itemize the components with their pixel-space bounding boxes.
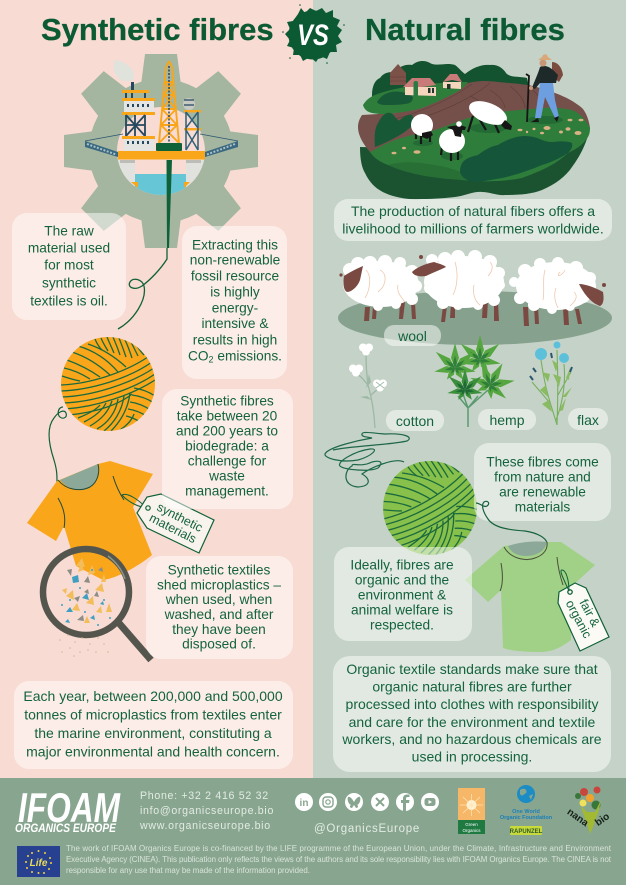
callout: microplastics: disposed of. [182, 636, 256, 652]
social handle: @OrganicsEurope [314, 823, 420, 835]
icon: green yarn ball [383, 461, 477, 555]
callout: extracting fossil resource: intensive & [202, 316, 268, 331]
heading: natural fibres: Natural fibres [365, 12, 565, 47]
logo: nana bio: nana [565, 807, 591, 829]
logo: EU LIFE [17, 846, 60, 877]
illustration: cotton plant [349, 344, 387, 428]
callout: extracting fossil resource: energy- [212, 300, 258, 316]
thread: rig to orange yarn [118, 160, 172, 329]
callout: biodegrade: and 200 years to [176, 424, 278, 438]
panel: natural background [313, 0, 626, 778]
callout: marine environment: major environmental and health concern. [26, 744, 280, 760]
callout: renewable: These fibres come [486, 454, 599, 470]
illustration: hemp plant [433, 335, 521, 427]
callout: livelihood: The production of natural fibers offers a [351, 203, 595, 219]
callout: renewable [474, 443, 611, 521]
illustration: farm island [358, 54, 590, 199]
callout: organic textile standards: and care for the environment and textile [349, 714, 596, 730]
icon: green t-shirt [465, 541, 595, 652]
label: flax: flax [577, 412, 599, 428]
label: wool [384, 325, 441, 346]
callout: organic textile standards: processed into clothes with responsibility [346, 696, 598, 712]
icon: fair and organic tag: fair & [576, 597, 603, 630]
disclaimer text: responsible for any use that may be made of the information provided. [66, 866, 310, 875]
callout: raw material [12, 213, 126, 320]
icon: synthetic materials tag: materials [147, 511, 199, 546]
logo: nana bio [565, 786, 612, 834]
callout: renewable: from nature and [494, 470, 591, 484]
disclaimer text: The work of IFOAM Organics Europe is co-financed by the LIFE programme of the European Union, under the Climate, Infrastructure and Environment [66, 844, 612, 853]
callout: raw material: synthetic [42, 276, 96, 290]
callout: ideally organic: animal welfare is [351, 602, 453, 618]
callout: ideally organic: respected. [370, 618, 434, 632]
icons: social media [295, 793, 439, 811]
label: hemp: hemp [489, 412, 525, 428]
contact details: Phone: +32 2 416 52 32 [140, 790, 269, 802]
callout: microplastics: Synthetic textiles [168, 562, 271, 578]
label: wool: wool [397, 328, 427, 344]
thread: green yarn to shirt [476, 501, 547, 543]
logo: Green Organics: Organics [462, 828, 481, 833]
callout: organic textile standards: organic natural fibres are further [372, 678, 572, 694]
heading: synthetic fibres: Synthetic fibres [41, 12, 274, 47]
callout: extracting fossil resource: emissions. [214, 348, 282, 364]
thread: yarn to shirt [49, 407, 66, 482]
panel: synthetic background [0, 0, 313, 778]
callout: biodegrade: biodegrade: a [185, 438, 269, 454]
callout: organic textile standards: Organic textile standards make sure that [346, 661, 598, 677]
logo: One World Organic Foundation: RAPUNZEL [510, 829, 543, 835]
icons: social media: in [300, 798, 308, 809]
label: cotton [386, 410, 444, 431]
callout: marine environment: tonnes of microplastics from textiles enter [24, 706, 282, 722]
icon: synthetic materials tag [122, 494, 214, 553]
logo: Green Organics [458, 788, 485, 834]
callout: extracting fossil resource: CO [188, 348, 209, 364]
callout: raw material: material used [28, 240, 110, 256]
callout: biodegrade: waste [208, 468, 245, 484]
icon: VS splat [282, 4, 345, 64]
callout: biodegrade [162, 389, 293, 509]
logo: nana bio: bio [593, 811, 612, 829]
callout: biodegrade: management. [185, 484, 269, 498]
callout: organic textile standards: used in processing. [412, 748, 532, 764]
icon: fair and organic tag [558, 570, 609, 651]
callout: renewable: materials [515, 500, 570, 514]
callout: ideally organic: Ideally, fibres are [350, 558, 454, 572]
callout: marine environment [14, 681, 293, 769]
callout: microplastics: when used, when [165, 592, 272, 607]
callout: microplastics [146, 556, 293, 659]
icon: orange t-shirt [27, 461, 153, 580]
contact details: info@organicseurope.bio [140, 805, 274, 817]
callout: biodegrade: take between 20 [177, 408, 278, 424]
callout: extracting fossil resource: is highly [210, 284, 260, 300]
disclaimer text: Executive Agency (CINEA). This publication only reflects the views of the authors and its sole responsibility lies with IFOAM Organics Europe. The CINEA is not [66, 855, 612, 864]
logo: IFOAM Organics Europe: ORGANICS EUROPE [15, 823, 116, 835]
thread: cotton to green yarn [325, 432, 409, 487]
callout: ideally organic: organic and the [355, 572, 449, 588]
callout: extracting fossil resource: fossil resource [191, 268, 279, 284]
callout: ideally organic [334, 547, 472, 641]
callout: raw material: for most [44, 258, 94, 272]
contact details: www.organicseurope.bio [139, 820, 271, 832]
callout: extracting fossil resource: 2 [209, 354, 214, 364]
label: cotton: cotton [396, 413, 434, 429]
label: hemp [478, 409, 536, 430]
logo: EU LIFE: Life [30, 858, 48, 869]
icon: orange yarn ball [61, 337, 155, 431]
callout: biodegrade: challenge for [188, 454, 267, 468]
callout: organic textile standards [333, 656, 611, 772]
callout: extracting fossil resource: non-renewable [190, 252, 280, 268]
callout: extracting fossil resource [182, 226, 287, 379]
panel: footer [0, 778, 626, 885]
callout: extracting fossil resource: results in high [193, 332, 277, 348]
illustration: flax plant [530, 342, 572, 425]
contact details [139, 790, 274, 832]
logo: IFOAM Organics Europe: IFOAM [18, 784, 121, 831]
icon: magnifying glass with microplastics [43, 549, 151, 660]
callout: renewable: are renewable [499, 484, 586, 500]
icon: VS splat: VS [297, 18, 329, 52]
callout: microplastics: they have been [172, 622, 266, 637]
callout: marine environment: the marine environment, constituting a [34, 725, 272, 741]
callout: organic textile standards: workers, and no hazardous chemicals are [341, 731, 602, 747]
callout: microplastics: shed microplastics – [157, 578, 281, 592]
icon: gear with oil rig [64, 54, 258, 248]
icon: fair and organic tag: organic [563, 598, 594, 641]
callout: raw material: textiles is oil. [30, 294, 108, 308]
disclaimer text [66, 844, 612, 875]
callout: extracting fossil resource: Extracting this [192, 238, 278, 252]
logo: Green Organics: Green [465, 822, 478, 827]
logo: IFOAM Organics Europe [15, 784, 121, 835]
icon: synthetic materials tag: synthetic [155, 500, 205, 535]
callout: marine environment: Each year, between 200,000 and 500,000 [23, 688, 283, 704]
callout: microplastics: washed, and after [164, 607, 274, 622]
label: flax [568, 408, 608, 430]
callout: biodegrade: Synthetic fibres [180, 394, 274, 408]
callout: livelihood [334, 199, 612, 241]
callout: raw material: The raw [44, 224, 94, 238]
logo: One World Organic Foundation [500, 785, 553, 835]
logo: One World Organic Foundation: One World [512, 809, 540, 815]
callout: ideally organic: environment & [358, 588, 446, 602]
callout: livelihood: livelihood to millions of farmers worldwide. [342, 220, 604, 236]
illustration: wool sheep [338, 250, 612, 345]
logo: One World Organic Foundation: Organic Foundation [500, 815, 553, 821]
